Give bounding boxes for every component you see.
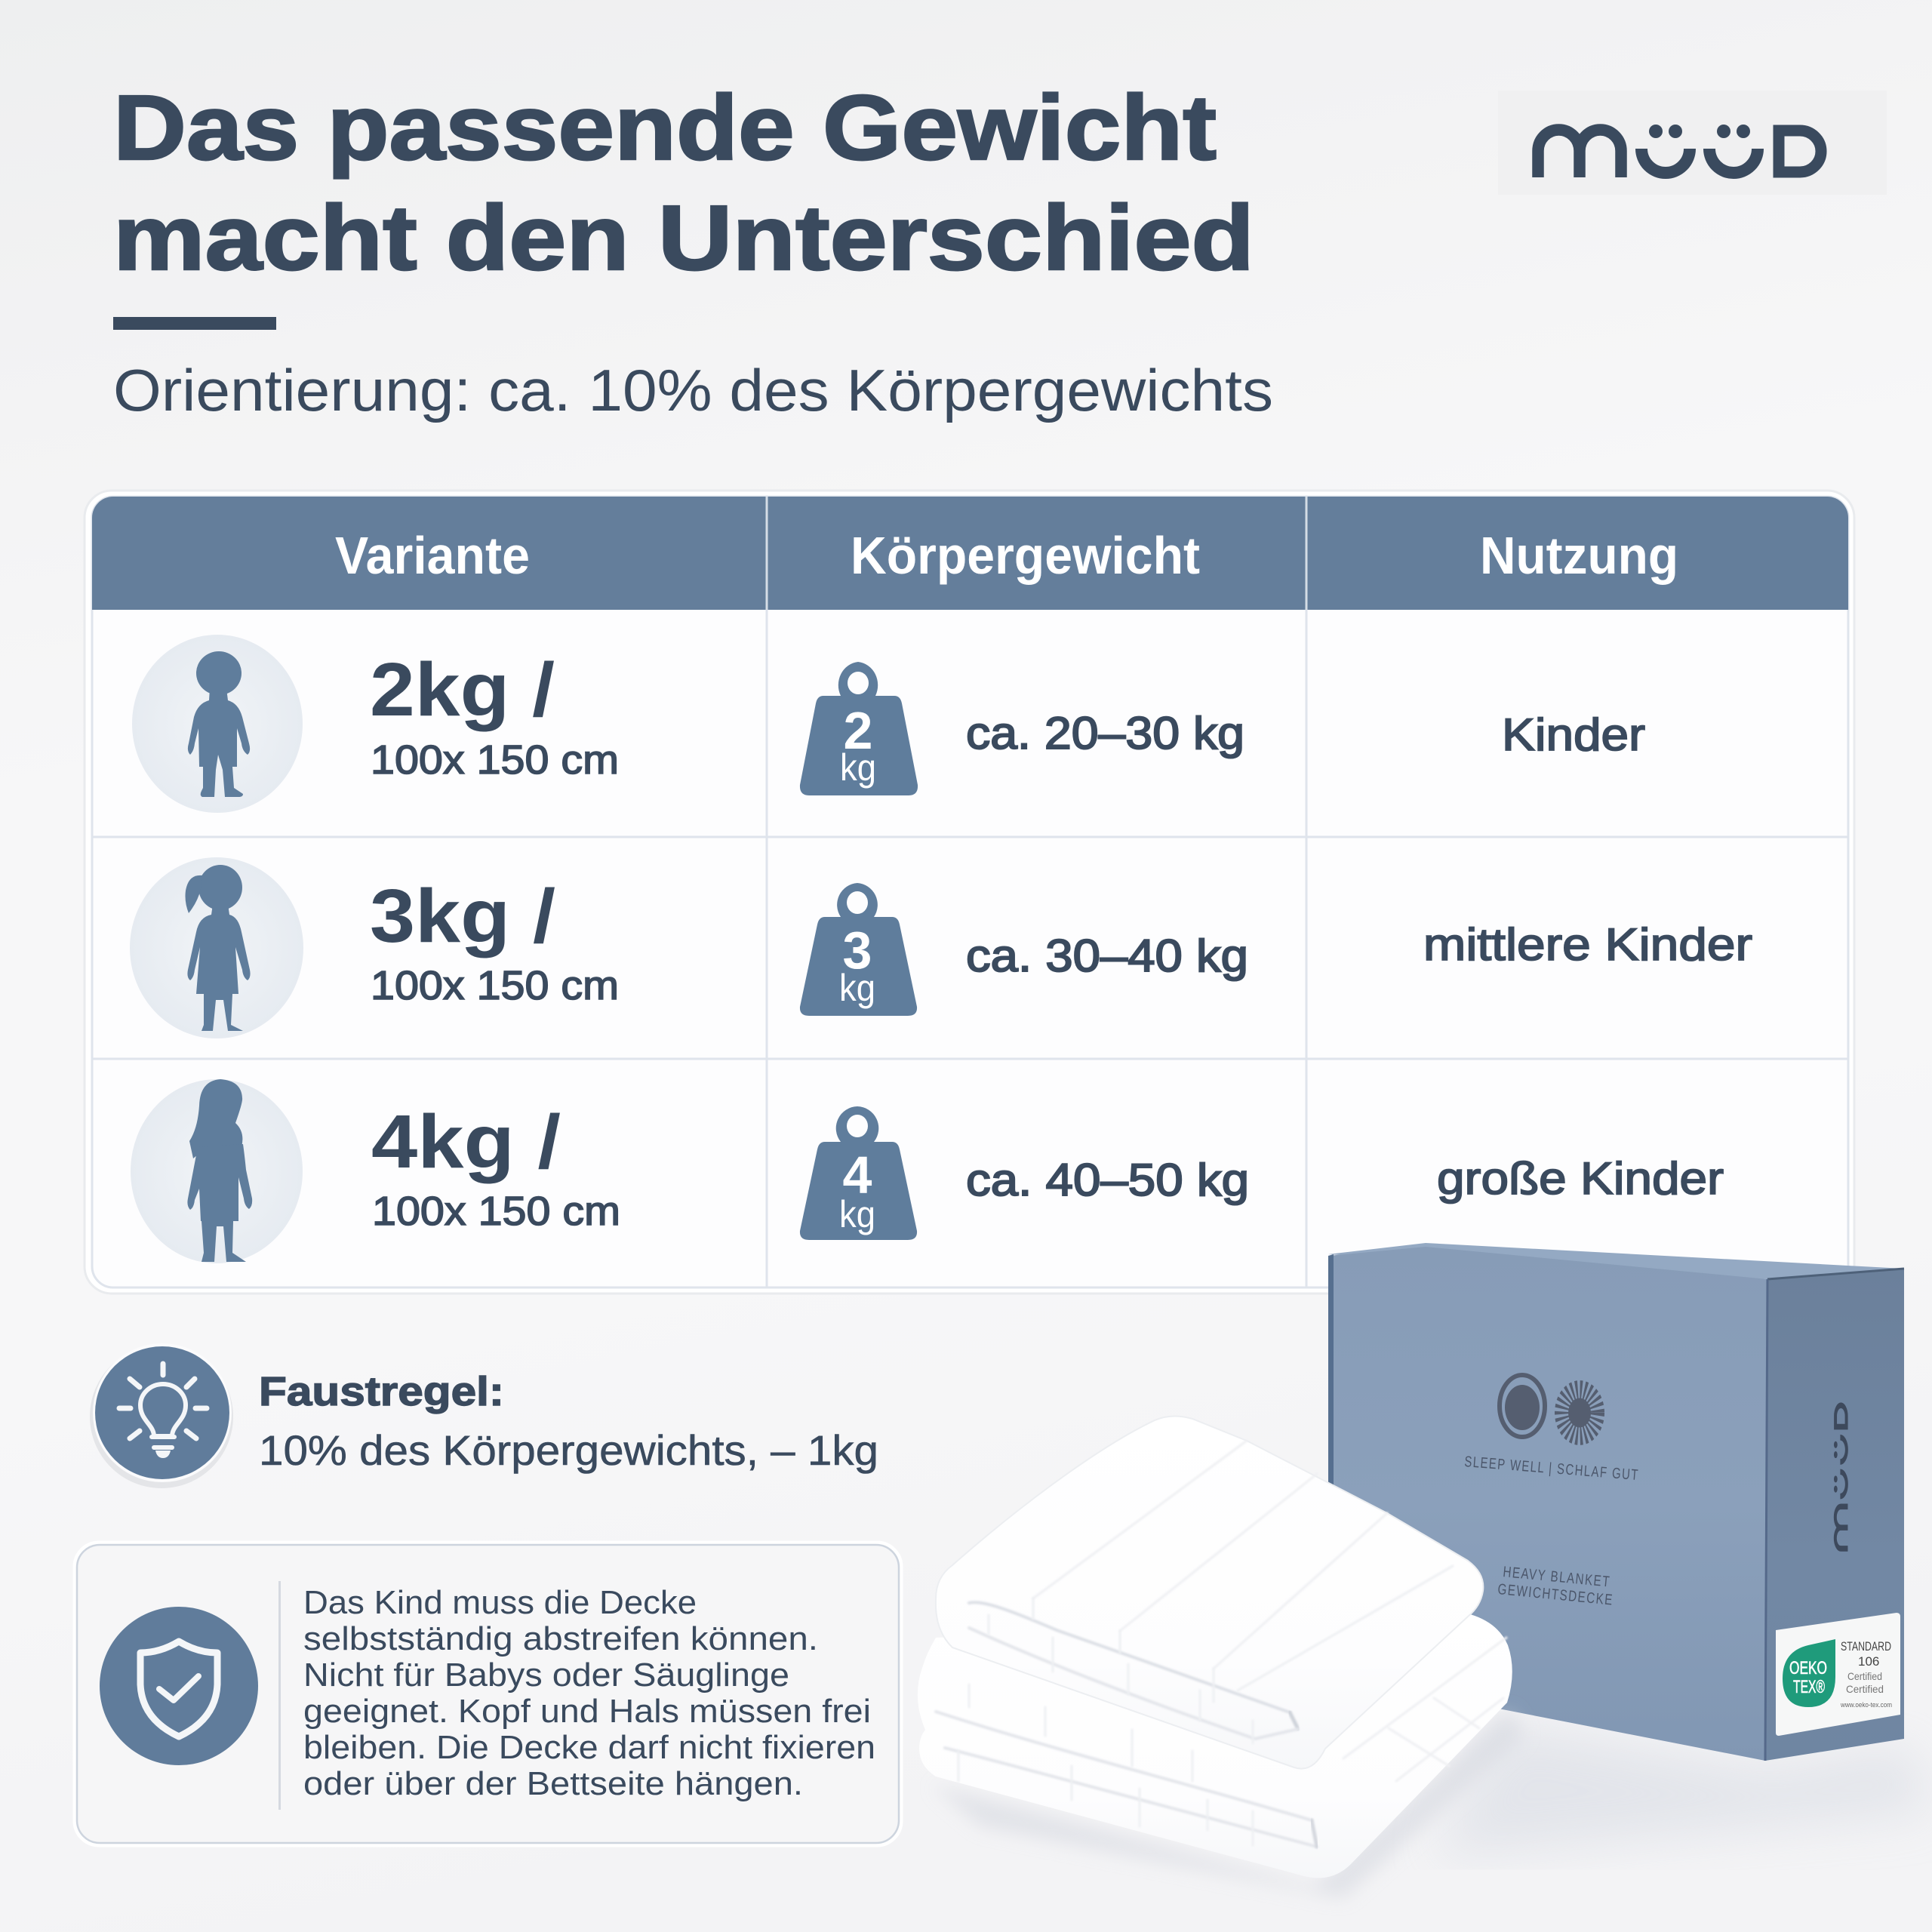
- box front face: [1328, 1247, 1767, 1761]
- logo: MÜÜD: [1498, 91, 1887, 195]
- variant label: [370, 648, 619, 783]
- usage: große Kinder: [1437, 1153, 1724, 1204]
- icon: 3 kg weight: [800, 883, 917, 1016]
- body weight: ca. 30–40 kg: [966, 931, 1248, 981]
- row 3: [131, 1079, 1724, 1263]
- body weight: ca. 40–50 kg: [966, 1155, 1249, 1205]
- folded white blanket: [918, 1416, 1512, 1878]
- blanket shadow: [932, 1709, 1524, 1898]
- box product name: HEAVY BLANKET: [1503, 1564, 1611, 1591]
- OEKO-TEX label: OEKO: [1789, 1658, 1827, 1678]
- OEKO-TEX label: STANDARD: [1841, 1639, 1891, 1654]
- OEKO-TEX label: 106: [1858, 1654, 1879, 1669]
- icon: 4 kg weight: kg: [839, 1193, 875, 1235]
- OEKO-TEX label: Certified: [1847, 1670, 1882, 1682]
- box product name: [1497, 1564, 1614, 1609]
- box top lid: [1328, 1243, 1904, 1279]
- title: [113, 76, 1254, 289]
- icon: girl with long hair silhouette: [131, 1079, 303, 1263]
- safety text: Nicht für Babys oder Säuglinge: [303, 1657, 789, 1694]
- icon: shield with check: [100, 1607, 258, 1765]
- usage: mittlere Kinder: [1423, 919, 1752, 970]
- icon: 3 kg weight: kg: [839, 967, 875, 1009]
- table header: Nutzung: [1480, 526, 1678, 585]
- text: rule of thumb: Faustregel:: [259, 1369, 504, 1414]
- variant label: 2kg /: [370, 648, 555, 732]
- subtitle: Orientierung: ca. 10% des Körpergewichts: [113, 357, 1273, 423]
- row 1: [132, 635, 1645, 813]
- safety text: selbstständig abstreifen können.: [303, 1620, 818, 1657]
- table header: Variante: [335, 526, 530, 585]
- variant label: 3kg /: [370, 874, 555, 958]
- box side logo: [1834, 1405, 1847, 1549]
- safety text: bleiben. Die Decke darf nicht fixieren: [303, 1729, 875, 1766]
- OEKO-TEX label: Certified: [1846, 1683, 1884, 1695]
- icon: boy silhouette: [132, 635, 303, 813]
- variant label: [371, 1100, 620, 1234]
- safety text: geeignet. Kopf und Hals müssen frei: [303, 1693, 871, 1730]
- table header: [92, 497, 1848, 610]
- icon: 2 kg weight: 2: [844, 701, 872, 760]
- icon: 3 kg weight: 3: [843, 921, 872, 980]
- OEKO-TEX label: [1776, 1613, 1900, 1736]
- row 2: [130, 857, 1752, 1038]
- table header: Körpergewicht: [851, 526, 1200, 585]
- upper blanket fold: [936, 1416, 1483, 1769]
- variant label: 100x 150 cm: [371, 963, 619, 1008]
- text: rule of thumb: [259, 1369, 878, 1474]
- variant label: 100x 150 cm: [372, 1189, 620, 1234]
- box side face: [1765, 1269, 1904, 1761]
- variant label: 4kg /: [371, 1100, 561, 1184]
- icon: 2 kg weight: [800, 662, 918, 795]
- icon: 4 kg weight: 4: [843, 1146, 872, 1204]
- safety text: Das Kind muss die Decke: [303, 1584, 697, 1621]
- variant label: [370, 874, 619, 1008]
- icon: 2 kg weight: kg: [840, 746, 876, 789]
- floor shadow: [1434, 1724, 1932, 1857]
- title: macht den Unterschied: [113, 186, 1254, 289]
- OEKO-TEX label: www.oeko-tex.com: [1840, 1701, 1892, 1709]
- icon: 4 kg weight: [800, 1106, 917, 1240]
- text: rule of thumb: 10% des Körpergewichts, – 1kg: [259, 1426, 878, 1474]
- panel: safety note: [75, 1543, 901, 1845]
- box product name: GEWICHTSDECKE: [1497, 1581, 1614, 1609]
- variant label: 100x 150 cm: [371, 737, 619, 783]
- title underline: [113, 317, 276, 330]
- safety text: oder über der Bettseite hängen.: [303, 1765, 803, 1802]
- lower blanket fold: [918, 1614, 1512, 1878]
- usage: Kinder: [1502, 709, 1645, 760]
- icon: light bulb badge: [90, 1343, 233, 1488]
- body weight: ca. 20–30 kg: [966, 708, 1244, 758]
- panel: weight table: [85, 491, 1854, 1294]
- box text: SLEEP WELL | SCHLAF GUT: [1464, 1454, 1640, 1484]
- safety text: [303, 1584, 875, 1802]
- icon: girl with ponytail silhouette: [130, 857, 303, 1038]
- box emblem: [1500, 1375, 1596, 1437]
- OEKO-TEX label: TEX®: [1793, 1677, 1825, 1697]
- title: Das passende Gewicht: [113, 76, 1217, 179]
- product box: [1328, 1243, 1904, 1761]
